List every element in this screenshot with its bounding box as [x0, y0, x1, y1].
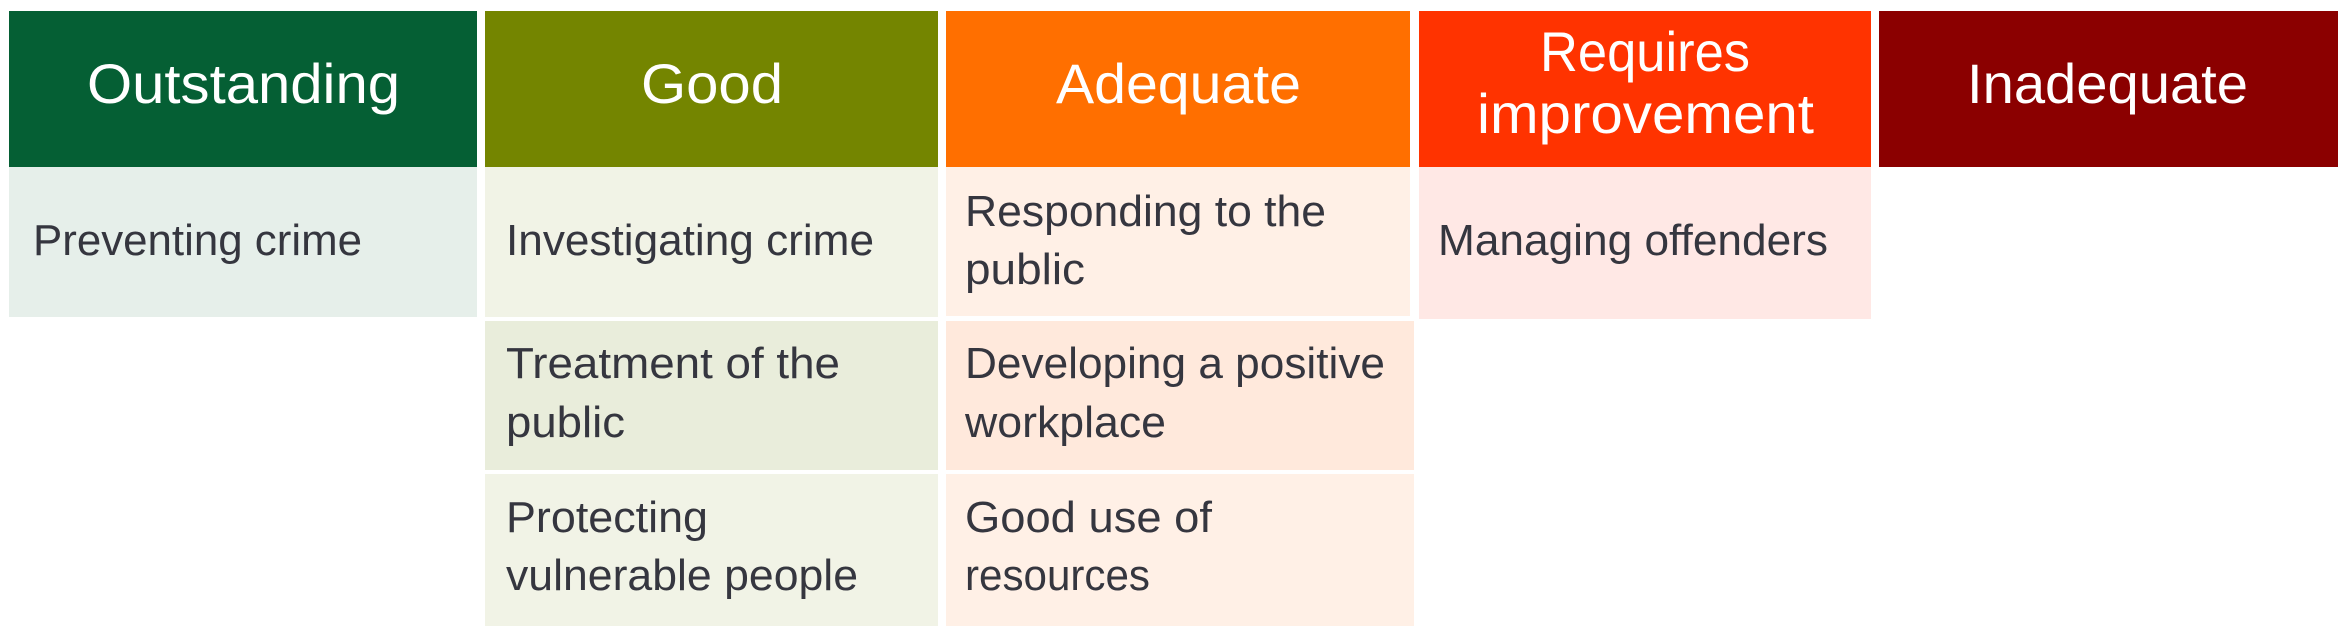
cell: Preventing crime: [9, 167, 477, 317]
cell: Developing a positive workplace: Developing a positive: [965, 339, 1385, 388]
header: Adequate: [946, 11, 1410, 167]
header: Requires improvement: [1419, 11, 1871, 167]
cell: Protecting vulnerable people: [485, 474, 938, 626]
cell: Developing a positive workplace: workplace: [964, 398, 1166, 447]
header: Inadequate: [1879, 11, 2338, 167]
header: Inadequate: Inadequate: [1967, 52, 2248, 115]
header: Good: [485, 11, 938, 167]
header: Good: Good: [641, 52, 783, 115]
cell: Responding to the public: [946, 167, 1410, 316]
header: Adequate: Adequate: [1056, 52, 1301, 115]
column: Requires improvement: [1419, 11, 1871, 319]
cell: Developing a positive workplace: [946, 321, 1414, 470]
header: Outstanding: Outstanding: [87, 52, 400, 115]
cell: Responding to the public: public: [965, 245, 1085, 294]
cell: Managing offenders: Managing offenders: [1438, 216, 1828, 265]
cell: Treatment of the public: public: [506, 398, 625, 447]
column: Outstanding: [9, 11, 477, 317]
cell: Investigating crime: [485, 167, 938, 317]
cell: Good use of resources: [946, 474, 1414, 626]
cell: Protecting vulnerable people: Protecting: [506, 493, 708, 542]
cell: Treatment of the public: Treatment of the: [506, 339, 840, 388]
cell: Treatment of the public: [485, 321, 938, 470]
header: Requires improvement: Requires: [1540, 20, 1750, 83]
header: Outstanding: [9, 11, 477, 167]
cell: Managing offenders: [1419, 167, 1871, 319]
cell: Good use of resources: Good use of: [965, 493, 1213, 542]
column: Inadequate: [1879, 11, 2338, 167]
column: Good: [485, 11, 938, 626]
cell: Responding to the public: Responding to the: [965, 187, 1326, 236]
cell: Investigating crime: Investigating crime: [506, 216, 874, 265]
header: Requires improvement: improvement: [1477, 82, 1814, 145]
cell: Preventing crime: Preventing crime: [33, 216, 362, 265]
cell: Protecting vulnerable people: vulnerable people: [506, 551, 858, 600]
column: Adequate: [946, 11, 1414, 626]
cell: Good use of resources: resources: [965, 551, 1150, 600]
